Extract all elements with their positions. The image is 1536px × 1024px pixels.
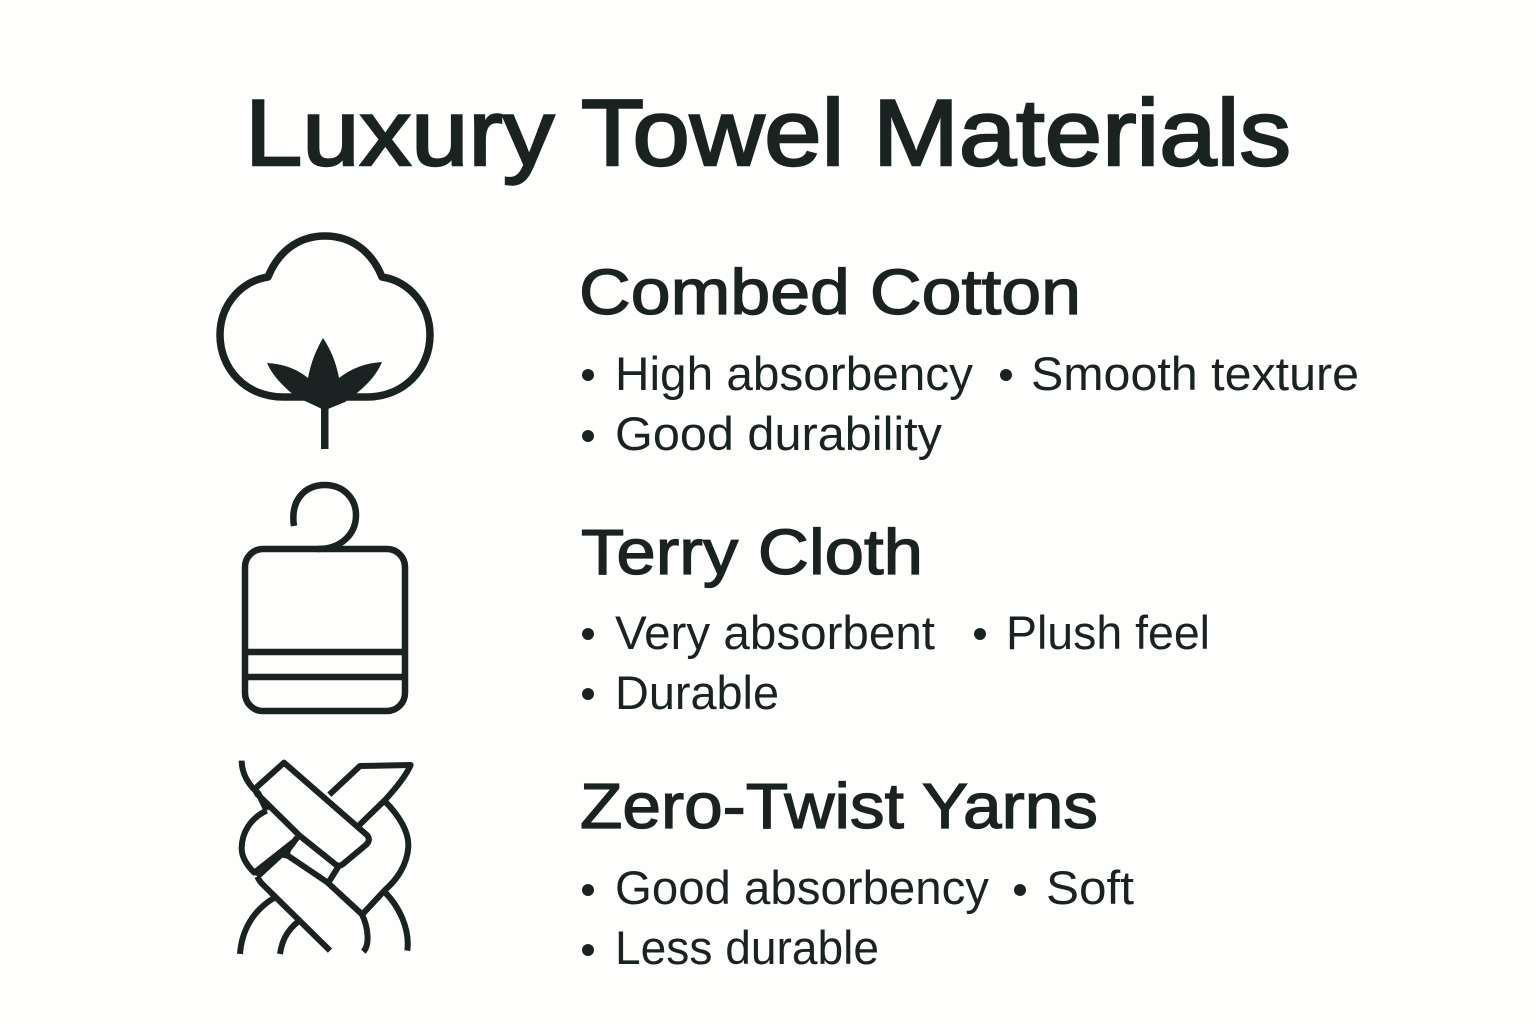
icon: braided yarn: [240, 761, 411, 954]
heading: zero-twist yarns: Zero-Twist Yarns: [580, 770, 1098, 842]
heading: terry cloth: Terry Cloth: [581, 516, 923, 588]
bullet list: combed cotton: High absorbency: [615, 347, 973, 400]
bullet list: terry cloth: Plush feel: [1006, 606, 1210, 659]
icon: hanging towel: [245, 485, 405, 711]
panel: terry cloth: [245, 485, 1210, 719]
bullet list: terry cloth: [582, 606, 1210, 719]
bullet list: combed cotton: [582, 347, 1359, 460]
panel: zero-twist yarns: [240, 761, 1134, 974]
bullet list: zero-twist yarns: [582, 861, 1134, 974]
bullet list: zero-twist yarns: Good absorbency: [615, 861, 989, 914]
title: Luxury Towel Materials: [245, 80, 1291, 185]
bullet list: zero-twist yarns: Soft: [1046, 861, 1134, 914]
bullet list: zero-twist yarns: Less durable: [615, 921, 879, 974]
icon: cotton boll: [220, 236, 430, 449]
heading: combed cotton: Combed Cotton: [579, 256, 1081, 328]
bullet list: combed cotton: Good durability: [615, 407, 943, 460]
bullet list: combed cotton: Smooth texture: [1031, 347, 1359, 400]
bullet list: terry cloth: Very absorbent: [615, 606, 935, 659]
panel: combed cotton: [220, 236, 1359, 460]
bullet list: terry cloth: Durable: [615, 666, 779, 719]
